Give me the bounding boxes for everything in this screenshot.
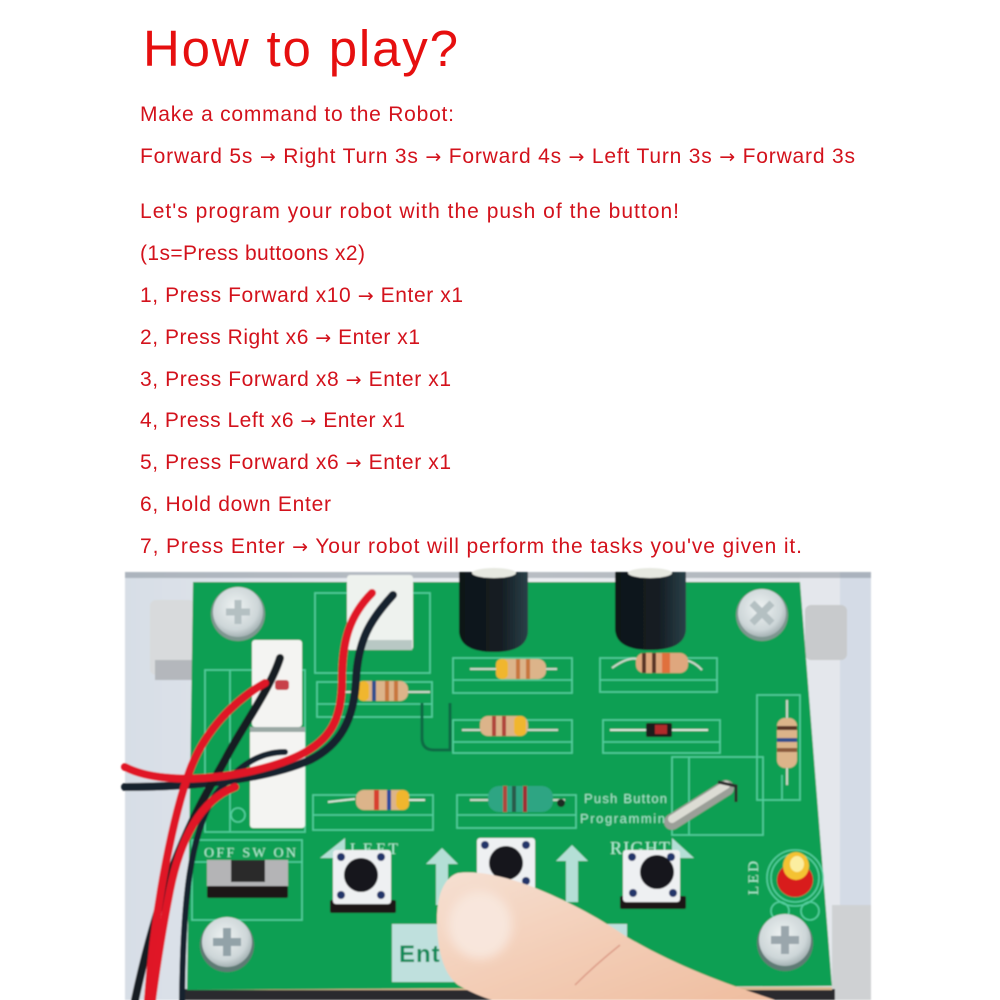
push button right <box>620 850 686 909</box>
step 3: 3, Press Forward x8 → Enter x1 <box>140 368 451 391</box>
up arrow one <box>426 848 458 905</box>
photo: circuit board with finger pressing button <box>125 568 871 1000</box>
Enter label plate: Enter <box>399 941 465 968</box>
screw top left <box>211 587 265 641</box>
crystal cylinder <box>672 782 736 822</box>
capacitors <box>459 568 686 652</box>
timing note: (1s=Press buttoons x2) <box>140 242 365 265</box>
switch label: OFF SW ON <box>204 846 296 861</box>
intro line: Make a command to the Robot: <box>140 103 454 126</box>
programming intro: Let's program your robot with the push of the button! <box>140 200 679 223</box>
red wires <box>125 593 372 779</box>
step 6: 6, Hold down Enter <box>140 493 331 516</box>
push button left <box>330 850 396 913</box>
right arrow <box>672 838 694 858</box>
step 2: 2, Press Right x6 → Enter x1 <box>140 326 420 349</box>
diode <box>610 723 708 737</box>
inductor <box>470 786 565 812</box>
step 7: 7, Press Enter → Your robot will perform the tasks you've given it. <box>140 535 802 558</box>
silkscreen outlines <box>192 593 823 920</box>
grey enclosure background <box>125 572 871 1000</box>
push button middle <box>477 838 535 892</box>
left label: LEFT <box>350 841 398 858</box>
silkscreen labels <box>204 791 762 895</box>
screws <box>200 587 813 972</box>
slide switch <box>207 860 288 898</box>
wires <box>125 593 393 1000</box>
step 1: 1, Press Forward x10 → Enter x1 <box>140 284 463 307</box>
text block: programming steps <box>140 200 802 558</box>
silkscreen arrows <box>320 838 694 905</box>
resistors <box>328 653 797 810</box>
green PCB <box>187 582 832 990</box>
step 5: 5, Press Forward x6 → Enter x1 <box>140 451 451 474</box>
Enter label plate <box>392 924 627 982</box>
right label: RIGHT <box>610 838 670 858</box>
title: How to play? <box>143 20 458 77</box>
finger <box>437 872 775 1000</box>
programming label: Programmin <box>580 811 665 826</box>
up arrow two <box>556 845 588 902</box>
white connectors <box>250 575 413 828</box>
step 4: 4, Press Left x6 → Enter x1 <box>140 409 405 432</box>
screw top right <box>736 589 788 641</box>
screw bottom left <box>200 917 254 972</box>
LED <box>777 852 813 897</box>
LED label: LED <box>746 861 762 895</box>
black wires <box>125 595 393 787</box>
push button label: Push Button <box>584 791 667 806</box>
dark U2 trace <box>422 703 450 750</box>
command sequence: Forward 5s → Right Turn 3s → Forward 4s → Left Turn 3s → Forward 3s <box>140 145 855 168</box>
screw bottom right <box>757 914 813 971</box>
left arrow <box>320 838 345 858</box>
text block: robot command <box>140 103 855 168</box>
